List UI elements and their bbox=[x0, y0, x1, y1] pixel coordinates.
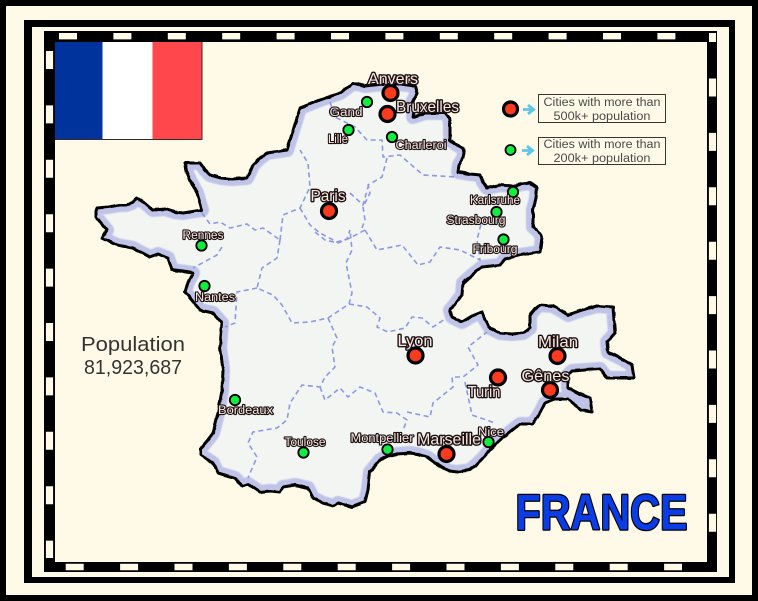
legend box: Cities with more than bbox=[544, 139, 660, 151]
city: Bordeaux bbox=[218, 395, 273, 417]
regional borders bbox=[193, 102, 495, 478]
city: Karlsruhe bbox=[470, 187, 520, 207]
city: Gand bbox=[330, 97, 372, 119]
city: Nantes bbox=[195, 281, 235, 304]
legend: cities over 500k bbox=[504, 94, 666, 123]
city: Strasbourg bbox=[446, 207, 506, 227]
city: Montpellier: Montpellier bbox=[350, 433, 414, 445]
city: Lille bbox=[328, 125, 354, 146]
legend box: 200k+ population bbox=[554, 153, 650, 165]
arrow: cyan bbox=[523, 105, 534, 114]
legend box: Cities with more than bbox=[544, 97, 660, 109]
icon: green city dot bbox=[506, 145, 516, 155]
population text: 81,923,687 bbox=[84, 357, 182, 379]
title: FRANCE: FRANCE bbox=[516, 484, 688, 540]
city: Anvers: Anvers bbox=[368, 71, 418, 88]
city: Milan: Milan bbox=[538, 334, 578, 351]
city: Strasbourg: Strasbourg bbox=[446, 215, 506, 227]
arrow: cyan bbox=[522, 146, 532, 155]
land fill bbox=[96, 83, 634, 507]
city: Fribourg bbox=[472, 234, 518, 256]
city: Fribourg: Fribourg bbox=[472, 244, 518, 256]
city: Bruxelles: Bruxelles bbox=[396, 99, 459, 116]
legend box: 500k+ population bbox=[554, 111, 650, 123]
city: Lyon bbox=[398, 333, 432, 363]
city: Turin: Turin bbox=[468, 384, 500, 401]
city: Charleroi: Charleroi bbox=[396, 140, 446, 152]
city: Anvers bbox=[368, 71, 418, 100]
city: Turin bbox=[468, 370, 506, 401]
population text bbox=[81, 334, 185, 379]
city: Nantes: Nantes bbox=[195, 292, 235, 304]
legend box bbox=[538, 94, 666, 123]
city: Montpellier bbox=[350, 433, 414, 455]
city: Toulose: Toulose bbox=[284, 437, 326, 449]
map of France bbox=[96, 83, 634, 507]
city: Rennes bbox=[182, 230, 224, 251]
city: Karlsruhe: Karlsruhe bbox=[470, 195, 520, 207]
city: Paris bbox=[310, 188, 346, 218]
city: Nice: Nice bbox=[478, 427, 504, 439]
city: Milan bbox=[538, 334, 578, 364]
icon: red city dot bbox=[504, 102, 518, 116]
population text: Population bbox=[81, 334, 185, 356]
city: Charleroi bbox=[387, 132, 446, 152]
city: Rennes: Rennes bbox=[182, 230, 224, 242]
city: Nice bbox=[478, 427, 504, 447]
city: Gênes: Gênes bbox=[522, 368, 570, 385]
city: Marseille bbox=[417, 432, 481, 462]
city: Bordeaux: Bordeaux bbox=[218, 405, 273, 417]
city: Lyon: Lyon bbox=[398, 333, 432, 350]
coastline bbox=[96, 83, 634, 507]
city: Gênes bbox=[522, 368, 570, 398]
city: Gand: Gand bbox=[330, 107, 362, 119]
city: Paris: Paris bbox=[310, 188, 346, 205]
legend: cities over 200k bbox=[506, 138, 666, 165]
legend box bbox=[538, 138, 666, 165]
city: Toulose bbox=[284, 437, 326, 458]
city: Lille: Lille bbox=[328, 134, 348, 146]
city: Bruxelles bbox=[380, 99, 459, 122]
inner coastal shading bbox=[96, 83, 634, 507]
city: Marseille: Marseille bbox=[417, 432, 481, 448]
flag of France bbox=[55, 42, 202, 140]
